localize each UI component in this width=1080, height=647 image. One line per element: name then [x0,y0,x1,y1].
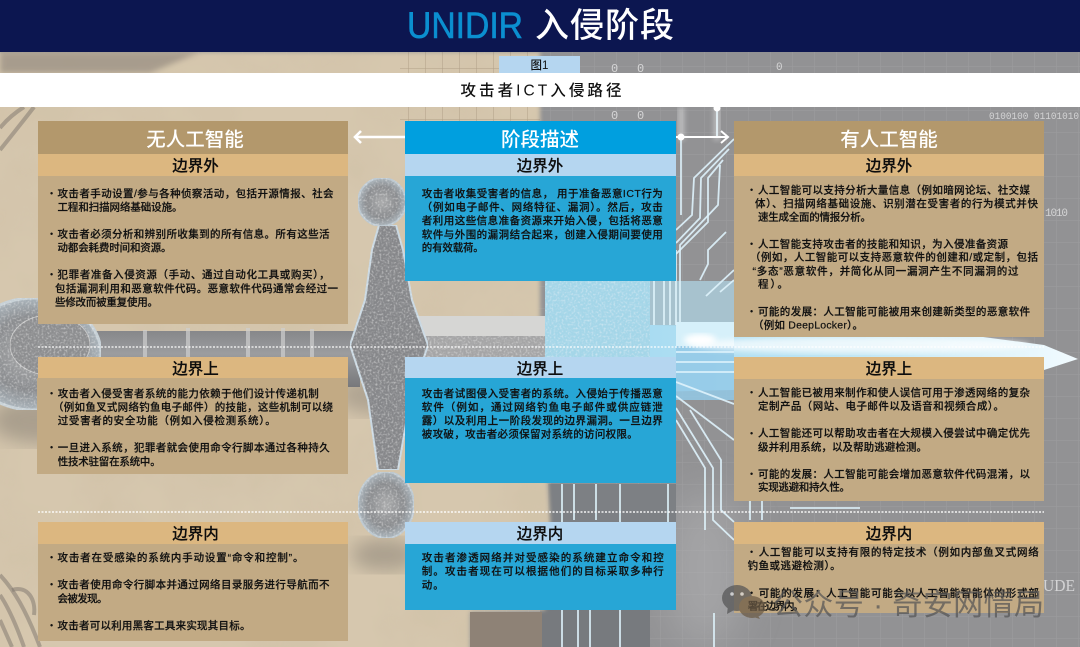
inside boundary description [405,522,676,610]
inside boundary with AI: 人工智能可以支持有限的特定技术（例如内部鱼叉式网络 [759,545,1039,558]
on boundary with AI: 级并利用系统，以及帮助逃避检测。 [758,440,927,453]
on boundary without AI: （例如鱼叉式网络钓鱼电子邮件）的技能，这些机制可以绕 [53,400,334,414]
heading: phase description [405,121,676,154]
outside boundary without AI: • [50,188,53,198]
inside boundary without AI: 攻击者使用命令行脚本并通过网络目录服务进行导航而不 [58,578,330,591]
watermark: 公众号 · 奇安网情局 [773,589,1044,622]
on boundary with AI: 人工智能已被用来制作和使人误信可用于渗透网络的复杂 [758,386,1030,399]
outside boundary description: 软件与外围的漏洞结合起来，创建入侵期间要使用 [422,228,663,241]
sword handle [90,331,360,387]
glowing blade [545,281,650,357]
on boundary without AI: 攻击者入侵受害者系统的能力依赖于他们设计传递机制 [58,387,319,400]
inside boundary description: 动。 [422,580,444,592]
outside boundary with AI: • [750,239,753,249]
faded digits: 1010 [1045,208,1068,220]
outside boundary without AI: 边界外 [172,157,219,175]
inside boundary description: 攻击者渗透网络并对受感染的系统建立命令和控 [422,551,664,564]
outside boundary description: 攻击者收集受害者的信息， 用于准备恶意ICT行为 [422,187,663,200]
icon: wechat [722,585,765,619]
inside boundary description: 制。攻击者现在可以根据他们的目标采取多种行 [422,565,664,578]
inside boundary without AI: 边界内 [172,525,219,543]
outside boundary without AI: 包括漏洞利用和恶意软件代码。恶意软件代码通常会经过一 [55,282,338,295]
inside boundary without AI: • [50,552,53,562]
outside boundary without AI: 攻击者手动设置/参与各种侦察活动，包括开源情报、社会 [58,187,334,200]
inside boundary with AI: 钓鱼或逃避检测）。 [748,559,841,572]
heading: without AI: 无人工智能 [146,129,244,151]
outside boundary description [405,154,676,281]
outside boundary description: 者利用这些信息准备资源来开始入侵，包括将恶意 [422,214,663,227]
header bar [0,0,1080,52]
figure title band: 攻击者ICT入侵路径 [460,82,622,100]
on boundary description: 软件（例如，通过网络钓鱼电子邮件或供应链泄 [422,400,663,414]
outside boundary without AI: 些修改而被重复使用。 [55,296,158,308]
on boundary with AI: • [750,469,753,479]
faded digits: 0 [637,109,644,123]
dark swirl ornaments in corners [0,107,40,647]
outside boundary with AI: （例如 DeepLocker）。 [753,319,863,332]
boundary divider lower [38,511,1044,513]
outside boundary without AI: • [50,229,53,239]
on boundary with AI: 定制产品（网站、电子邮件以及语音和视频合成）。 [758,400,1004,413]
title: UNIDIR [407,5,523,46]
inside boundary without AI: 攻击者可以利用黑客工具来实现其目标。 [58,619,250,632]
panel: with AI [734,121,1044,613]
inside boundary with AI: 边界内 [866,525,912,543]
arrow: to left column [355,131,405,143]
inside boundary with AI [734,522,1044,613]
outside boundary with AI: （例如，人工智能可以支持恶意软件的创建和/或定制，包括 [750,251,1038,264]
outside boundary description: 边界外 [517,157,564,175]
boundary divider upper [38,346,1044,348]
outside boundary with AI: 速生成全面的情报分析。 [758,210,871,223]
outside boundary with AI: 可能的发展：人工智能可能被用来创建新类型的恶意软件 [758,305,1030,318]
on boundary with AI: • [750,388,753,398]
on boundary without AI: 过受害者的安全功能（例如入侵检测系统）。 [58,414,276,427]
outside boundary with AI [734,154,1044,337]
panel: phase description [405,121,676,610]
on boundary with AI: • [750,428,753,438]
inside boundary with AI: 署在边界内。 [748,600,804,613]
outside boundary with AI: 体）、扫描网络基础设施、识别潜在受害者的行为模式并快 [755,197,1038,210]
on boundary without AI: 一旦进入系统，犯罪者就会使用命令行脚本通过各种持久 [58,441,330,454]
heading: with AI [734,121,1044,154]
panel: without AI [37,121,348,641]
outside boundary description: 的有效载荷。 [422,241,484,254]
inside boundary description: 边界内 [517,525,563,543]
on boundary description: 攻击者试图侵入受害者的系统。入侵始于传播恶意 [422,387,663,400]
on boundary with AI: 可能的发展：人工智能可能会增加恶意软件代码混淆，以 [758,467,1030,480]
outside boundary without AI: • [50,270,53,280]
on boundary without AI [37,357,348,474]
inside boundary with AI: • [750,547,753,557]
title: 入侵阶段 [535,7,674,45]
on boundary with AI: 人工智能还可以帮助攻击者在大规模入侵尝试中确定优先 [758,427,1030,440]
figure label [499,56,580,73]
figure title band [0,73,1080,107]
on boundary without AI: • [50,442,53,452]
inside boundary with AI: 可能的发展：人工智能可能会以人工智能智能体的形式部 [759,586,1039,599]
sword shadows [0,396,90,444]
sword pommel [0,298,101,410]
heading: with AI: 有人工智能 [840,129,938,151]
silver blade section [405,316,545,336]
outside boundary with AI: “多态”恶意软件，并简化从同一漏洞产生不同漏洞的过 [752,264,1019,277]
inside boundary without AI: 会被发现。 [58,592,108,605]
on boundary description: 边界上 [517,360,563,378]
faded digits: 0 [611,62,618,76]
on boundary with AI: 实现逃避和持久性。 [758,481,850,494]
faded digits: UDE [1043,576,1075,595]
on boundary description [405,357,676,483]
outside boundary with AI: 人工智能可以支持分析大量信息（例如暗网论坛、社交媒 [758,183,1030,196]
inside boundary without AI: • [50,620,53,630]
arrow: to right column [676,131,728,143]
outside boundary with AI: 程）。 [758,278,788,291]
outside boundary with AI: 人工智能支持攻击者的技能和知识，为入侵准备资源 [758,237,1008,250]
inside boundary without AI: 攻击者在受感染的系统内手动设置“命令和控制”。 [58,551,304,564]
on boundary without AI: • [50,388,53,398]
figure label: 图1 [531,59,548,72]
outside boundary without AI: 动都会耗费时间和资源。 [58,241,172,254]
outside boundary without AI [38,154,348,324]
on boundary with AI: 边界上 [866,360,912,378]
title [407,5,674,46]
outside boundary without AI: 攻击者必须分析和辨别所收集到的所有信息。所有这些活 [58,228,330,240]
outside boundary with AI: • [750,306,753,316]
circuit traces [562,107,860,647]
sword crossguard [350,225,428,470]
on boundary without AI: 边界上 [172,360,219,378]
on boundary description: 露）以及利用上一阶段发现的边界漏洞。一旦边界 [422,414,663,427]
heading: phase description: 阶段描述 [501,129,579,151]
on boundary description: 被攻破，攻击者必须保留对系统的访问权限。 [422,428,638,440]
faded digits: 0 [611,109,618,123]
faded digits: 0 [637,62,644,76]
outside boundary without AI: 犯罪者准备入侵资源（手动、通过自动化工具或购买）， [58,268,330,281]
faded digits [611,62,1079,595]
on boundary with AI [734,357,1044,501]
outside boundary description: （例如电子邮件、网络特征、漏洞）。然后，攻击 [422,200,663,214]
outside boundary with AI: • [750,185,753,195]
outside boundary without AI: 工程和扫描网络基础设施。 [58,200,182,214]
outside boundary with AI: 边界外 [866,157,913,175]
on boundary without AI: 性技术驻留在系统中。 [58,455,161,468]
inside boundary with AI: • [750,588,753,598]
heading: without AI [38,121,348,154]
faded digits: 0 [776,62,783,74]
inside boundary without AI: • [50,580,53,590]
inside boundary without AI [38,522,348,641]
